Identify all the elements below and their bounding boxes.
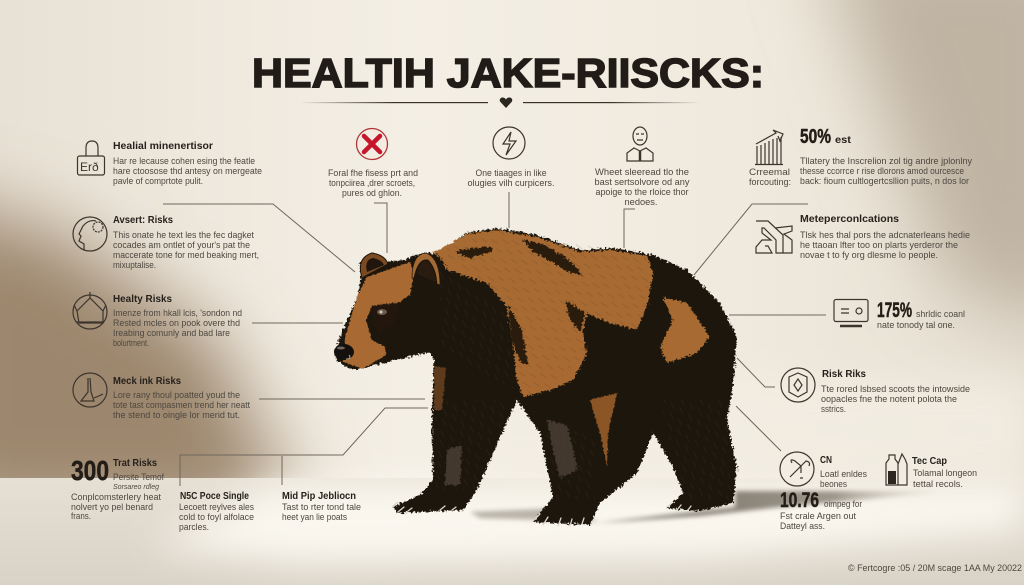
body text: Rested mcles on pook overe thd xyxy=(113,318,240,328)
body text: Lore rany thoul poatted youd the xyxy=(113,390,240,400)
body text: Datteyl ass. xyxy=(780,521,825,531)
body text: tettal recols. xyxy=(913,479,963,489)
shoulder fur patch xyxy=(433,230,653,397)
heading: Risk Riks xyxy=(822,368,866,380)
body text: parcles. xyxy=(179,522,209,532)
body text: maccerate tone for med beaking mert, xyxy=(113,250,259,260)
icon caption xyxy=(749,167,791,187)
stat number: 300 xyxy=(71,455,109,486)
body text: pures od ghlon. xyxy=(342,188,402,198)
body text: nolvert yo pel benard xyxy=(71,502,153,512)
panel: cn xyxy=(780,452,867,489)
panel: mid pip jebliocn xyxy=(282,490,361,522)
stat suffix: est xyxy=(835,134,852,146)
icon: padlock xyxy=(78,141,104,175)
dark back stripes xyxy=(455,239,585,365)
body text: Sorsareo rdleg xyxy=(113,484,159,491)
body text: heet yan lie poats xyxy=(282,512,347,522)
icon: house shape xyxy=(73,292,107,329)
leg highlight xyxy=(434,366,446,410)
icon caption: Crreemal xyxy=(749,167,790,177)
body text: Tolamal longeon xyxy=(913,468,977,478)
icon: red cross xyxy=(356,128,388,160)
body text: beones xyxy=(820,479,847,489)
body text: Loatl enldes xyxy=(820,469,867,479)
left ear xyxy=(360,253,388,278)
icon: man in suit xyxy=(627,127,653,161)
heading: N5C Poce Single xyxy=(180,490,249,502)
heading: Avsert: Risks xyxy=(113,214,173,226)
icon: abstract bracket xyxy=(756,221,792,253)
body text xyxy=(282,502,361,522)
body text: the stend to oingle lor merid tut. xyxy=(113,410,240,420)
panel: person note xyxy=(594,127,690,207)
panel: meck ink risks xyxy=(73,373,250,420)
bear illustration xyxy=(334,228,737,526)
body text: frans. xyxy=(71,511,91,521)
panel: 300 trat risks xyxy=(71,455,164,521)
title divider with heart xyxy=(300,98,700,108)
body text: Foral fhe fisess prt and xyxy=(328,168,418,178)
claws xyxy=(393,502,691,526)
body text: bast sertsolvore od any xyxy=(594,177,690,187)
body text xyxy=(800,156,972,186)
panel: healial minenertisor xyxy=(78,140,262,186)
body text: Fst crale Argen out xyxy=(780,511,856,521)
panel: risk riks xyxy=(781,368,970,414)
body text xyxy=(594,167,690,207)
shoulder hair texture xyxy=(433,230,648,397)
panel: 50% est xyxy=(749,126,972,187)
body text: cold to foyl alfolace xyxy=(179,512,254,522)
body text: Lecoett reylves ales xyxy=(179,502,254,512)
body text xyxy=(780,499,862,531)
body text: cocades am ontlet of your's pat the xyxy=(113,240,250,250)
heading: Trat Risks xyxy=(113,457,157,469)
body text: One tiaages in like xyxy=(476,168,546,178)
body text: nate tonody tal one. xyxy=(877,320,955,330)
body text xyxy=(913,468,977,489)
body text: apoige to the rloice thor xyxy=(596,187,689,197)
ground shadow xyxy=(470,491,935,523)
body text: Tllatery the Inscrelion zol tig andre jplonlny xyxy=(800,156,972,166)
icon: badge xyxy=(781,368,815,402)
body text: Ireabing comunly and bad lare xyxy=(113,328,230,338)
heading: CN xyxy=(820,454,832,466)
body text xyxy=(113,230,259,270)
body text: bolurtment. xyxy=(113,338,149,348)
body text: Tlsk hes thal pors the adcnaterleans hedie xyxy=(800,230,970,240)
body text: Conplcomsterlery heat xyxy=(71,492,161,502)
right ear xyxy=(412,253,440,285)
title: HEALTIH JAKE-RIISCKS: xyxy=(252,50,764,96)
body text: tote tast compasmen trend her neatt xyxy=(113,400,250,410)
icon: padlock: Erð xyxy=(80,160,99,174)
body text: sstrics. xyxy=(821,404,846,414)
body text xyxy=(179,502,254,532)
stat number: 10.76 xyxy=(780,489,819,512)
body text: he ttaoan lfter too on plarts yerderor the xyxy=(800,240,958,250)
stat number: 175% xyxy=(877,299,912,322)
panel: healty risks xyxy=(73,292,242,348)
icon: rising bar chart xyxy=(755,130,783,164)
body text xyxy=(820,469,867,489)
body text: This onate he text les the fec dagket xyxy=(113,230,254,240)
body text: oimpeg for xyxy=(824,499,862,509)
body text: Har re lecause cohen esing the featle xyxy=(113,156,255,166)
icon: bottles xyxy=(886,454,907,485)
body text: nedoes. xyxy=(624,197,658,207)
panel: tec cap xyxy=(886,454,977,489)
heading: Meteperconlcations xyxy=(800,213,899,225)
body text: hare ctoosose thd antesy on mergeate xyxy=(113,166,262,176)
heading: Meck ink Risks xyxy=(113,375,181,387)
head fur xyxy=(343,262,414,369)
icon: lightning bolt xyxy=(493,127,525,159)
panel: avsert risks xyxy=(73,214,259,270)
body text: Imenze from hkall lcis, 'sondon nd xyxy=(113,308,242,318)
bear body silhouette xyxy=(334,228,737,525)
body text xyxy=(800,230,970,260)
body text: oopacles fne the notent polota the xyxy=(821,394,957,404)
body text: Persite Temof xyxy=(113,472,164,482)
icon: monitor xyxy=(834,300,868,326)
nose xyxy=(334,344,354,360)
body text: thesse ccorrce r rise dlorons amod ourcesce xyxy=(800,166,964,176)
icon: neck shape xyxy=(73,373,107,407)
body text: olugies vilh curpicers. xyxy=(468,178,554,188)
body text xyxy=(877,309,965,330)
body text: shrldic coanl xyxy=(916,309,965,319)
panel: n5c poce single xyxy=(179,490,254,532)
body text: mixuptalise. xyxy=(113,260,156,270)
body text xyxy=(468,168,554,188)
panel: lightning note xyxy=(468,127,554,188)
body text: back: fioum cultlogertcsllion puits, n dos lor xyxy=(800,176,969,186)
body text: Wheet sleeread tlo the xyxy=(595,167,689,177)
panel: meteperconlcations xyxy=(756,213,970,260)
eye patch and eye xyxy=(372,303,399,334)
body text: pavle of comprtote pulit. xyxy=(113,176,203,186)
heading: Mid Pip Jebliocn xyxy=(282,490,356,502)
body text: tonpciirea ,drer scroets, xyxy=(329,178,415,188)
body text xyxy=(113,156,262,186)
body text: Tte rored lsbsed scoots the intowside xyxy=(821,384,970,394)
stat number: 50% xyxy=(800,126,831,148)
lower leg grey fur xyxy=(445,420,578,485)
panel: 175% xyxy=(834,299,965,330)
body text xyxy=(113,308,242,348)
upper hind leg patch xyxy=(590,393,617,467)
heading: Healty Risks xyxy=(113,293,172,305)
body text xyxy=(328,168,418,198)
panel: red cross note xyxy=(328,128,418,198)
connector lines xyxy=(163,192,826,486)
body text xyxy=(821,384,970,414)
body text xyxy=(113,390,250,420)
panel: 10.76 xyxy=(780,489,862,531)
rump fur patch xyxy=(660,297,710,363)
icon caption: forcouting: xyxy=(749,177,791,187)
body text xyxy=(71,472,164,521)
heading: Healial minenertisor xyxy=(113,140,213,152)
body text: novae t to fy org dlesme lo people. xyxy=(800,250,938,260)
icon: squiggle limb xyxy=(780,452,814,486)
heading: Tec Cap xyxy=(912,455,947,467)
body text: Tast to rter tond tale xyxy=(282,502,361,512)
icon: head with brain xyxy=(73,217,107,251)
